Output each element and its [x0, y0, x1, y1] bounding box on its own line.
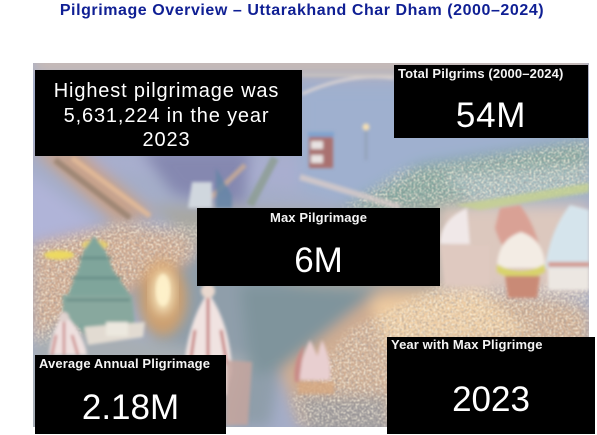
sky and river base	[33, 63, 589, 427]
awning	[455, 183, 589, 210]
callout text: Highest pilgrimage was	[54, 80, 279, 102]
crowd texture	[33, 138, 589, 427]
teal temple	[62, 236, 135, 340]
bridge top right	[302, 77, 394, 94]
left bridge warm	[33, 150, 155, 222]
lower left base	[25, 320, 250, 435]
promenade	[300, 177, 400, 207]
river blues	[33, 156, 300, 190]
KPI value: 2023	[452, 380, 530, 419]
small pavilion	[188, 182, 212, 208]
left white shikhara	[49, 312, 87, 355]
callout text: 5,631,224 in the year	[64, 104, 269, 126]
small twin shikharas lower middle	[300, 340, 322, 380]
yellow umbrellas	[44, 250, 74, 260]
water glow	[139, 260, 187, 336]
warm lower crowd	[33, 225, 195, 350]
right temple zone	[440, 205, 589, 295]
KPI card: year with max pilgrimage	[387, 337, 595, 434]
right temples	[440, 208, 470, 244]
KPI value: 6M	[294, 241, 343, 280]
title: Pilgrimage Overview – Uttarakhand Char Dham (2000–2024)	[60, 2, 544, 19]
KPI card: max pilgrimage	[197, 208, 440, 286]
background photo: riverside temples and crowd	[33, 63, 589, 427]
KPI label: Max Pilgrimage	[270, 210, 367, 225]
callout text	[54, 80, 279, 151]
upper bank haze	[33, 55, 589, 73]
central water	[130, 250, 380, 427]
KPI value: 54M	[456, 96, 526, 135]
KPI label: Year with Max Pligrimge	[391, 337, 543, 352]
KPI label: Total Pilgrims (2000–2024)	[398, 66, 563, 81]
left ghat stripes	[55, 160, 130, 218]
callout: highest pilgrimage	[35, 70, 302, 156]
KPI value: 2.18M	[82, 388, 179, 427]
KPI card: total pilgrims	[394, 65, 588, 138]
tower	[309, 134, 333, 168]
KPI label: Average Annual Pligrimage	[39, 356, 210, 371]
centre white shikhara	[184, 292, 232, 395]
KPI card: average annual pilgrimage	[35, 355, 226, 434]
callout text: 2023	[143, 129, 190, 151]
small lamp lights	[362, 124, 370, 130]
